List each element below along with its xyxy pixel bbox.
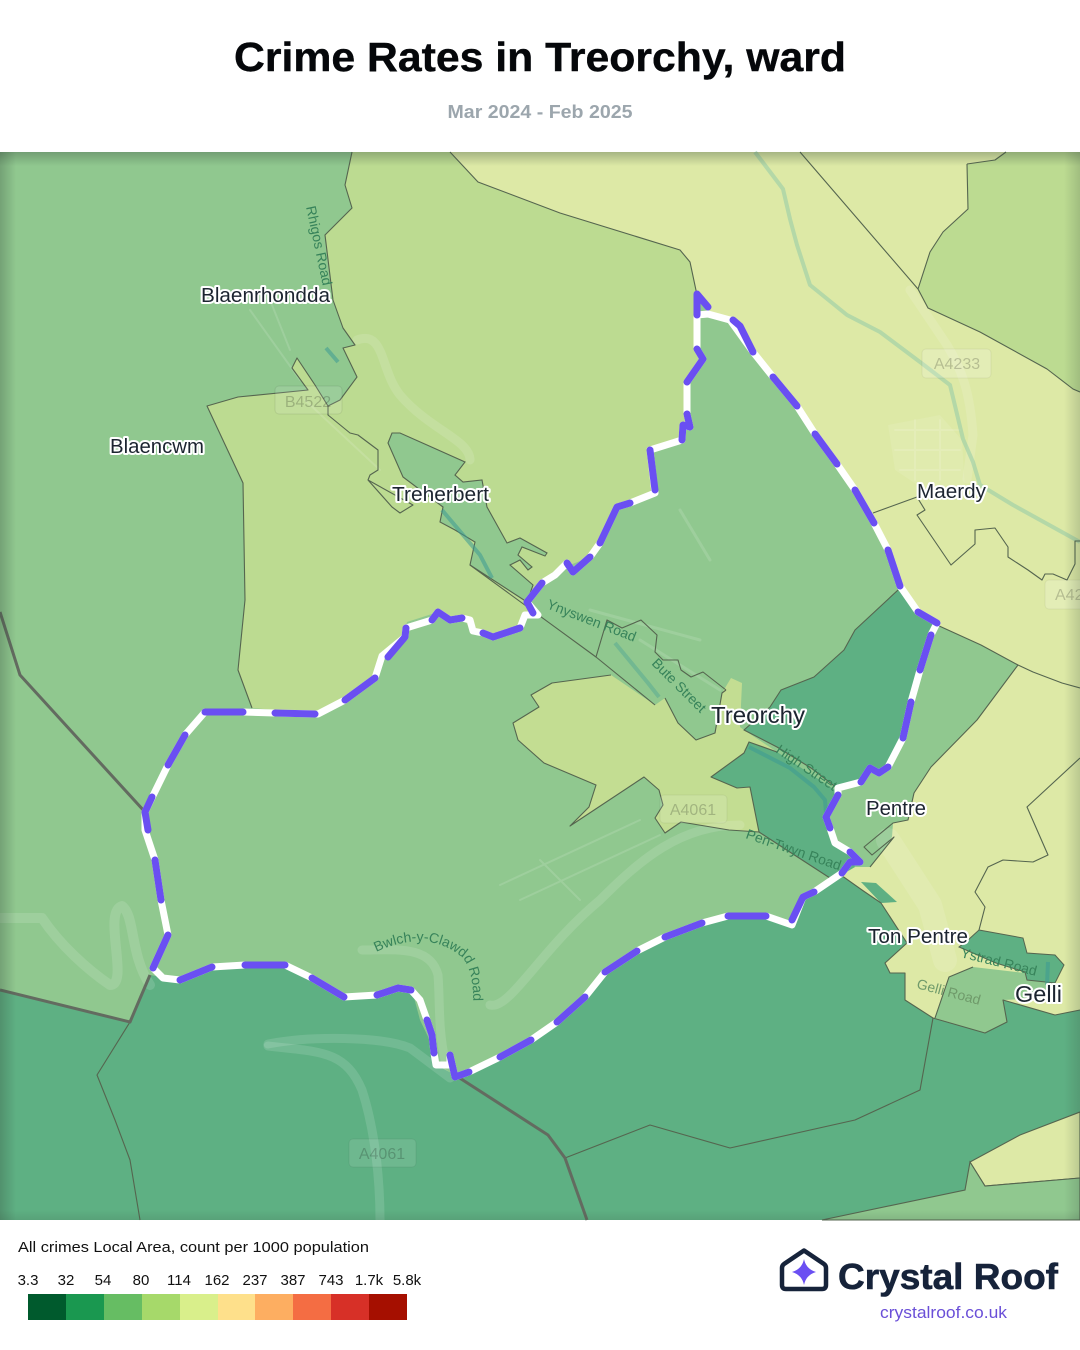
legend scale values: 743 <box>318 1272 344 1289</box>
legend <box>18 1239 422 1320</box>
street names: Bute Street <box>649 655 710 716</box>
place names: Blaenrhondda <box>201 285 331 307</box>
website link: crystalroof.co.uk <box>880 1304 1008 1322</box>
area: yellow southeast <box>970 1112 1080 1186</box>
area: Gelli medium cell <box>935 967 1055 1033</box>
area: pale green central Treorchy <box>513 675 777 833</box>
road number badges: A4061 <box>359 1146 405 1163</box>
area: dark green Ton Pentre patch <box>861 882 897 903</box>
area: Treherbert medium-green cell <box>388 433 547 602</box>
area: dark green south of High Street <box>711 742 855 880</box>
street names: Rhigos Road <box>303 204 336 287</box>
street names: Ystrad Road <box>959 944 1039 979</box>
area: Pentre medium cell <box>827 625 1018 867</box>
place names: Maerdy <box>917 481 986 503</box>
road number badges <box>275 349 1080 1167</box>
legend scale values: 5.8k <box>393 1272 422 1289</box>
map edge shading <box>0 152 1080 1220</box>
street names: Pen-Twyn Road <box>744 826 843 873</box>
place names: Pentre <box>866 798 926 820</box>
area: medium green southeast corner <box>822 1162 1080 1220</box>
place names: Gelli <box>1015 981 1062 1007</box>
area: pale green north-east corner <box>918 152 1080 392</box>
legend scale values: 237 <box>242 1272 268 1289</box>
legend scale values: 3.3 <box>18 1272 38 1289</box>
ward boundary: purple dashes <box>145 294 937 1077</box>
legend scale values: 80 <box>133 1272 149 1289</box>
legend colour ramp <box>28 1294 407 1320</box>
ward boundary: white casing <box>145 295 937 1077</box>
place names: Treorchy <box>711 702 806 728</box>
wordmark: Crystal Roof <box>838 1256 1059 1297</box>
road number badges: B4522 <box>285 394 331 411</box>
street names: Bwlch-y-Clawdd Road <box>374 932 484 1000</box>
place names: Treherbert <box>392 484 489 506</box>
area: yellow north-east <box>450 152 1080 1033</box>
legend scale values: 114 <box>167 1272 191 1289</box>
road number badges: A4233 <box>934 356 980 373</box>
area: dark green southern moorland <box>0 873 1080 1220</box>
place names <box>110 285 1062 1007</box>
legend scale values: 54 <box>95 1272 111 1289</box>
area: pale green Treherbert <box>207 152 703 714</box>
icon: house with star <box>782 1250 826 1289</box>
legend scale values <box>18 1272 422 1289</box>
street names: High Street <box>773 741 840 794</box>
boundary lines <box>0 152 1080 1220</box>
logo: Crystal Roof <box>782 1250 1059 1322</box>
street names: Ynyswen Road <box>545 596 639 645</box>
area: dark green north of High Street <box>744 590 937 788</box>
roads and rivers <box>0 152 1080 1220</box>
street names <box>303 204 1039 1045</box>
area: Gelli dark cell <box>959 930 1064 983</box>
place names: Blaencwm <box>110 436 204 458</box>
legend scale values: 32 <box>58 1272 74 1289</box>
legend scale values: 387 <box>280 1272 306 1289</box>
legend scale values: 162 <box>204 1272 230 1289</box>
subtitle: date range: Mar 2024 - Feb 2025 <box>448 101 632 122</box>
choropleth map <box>0 150 1080 1220</box>
legend title: All crimes Local Area, count per 1000 population <box>18 1239 369 1256</box>
map base: medium green areas <box>0 152 1080 1220</box>
title: Crime Rates in Treorchy, ward <box>234 34 846 80</box>
street names: Gelli Road <box>915 975 983 1008</box>
road number badges: A4061 <box>670 802 716 819</box>
place names: Ton Pentre <box>868 926 968 948</box>
legend scale values: 1.7k <box>355 1272 384 1289</box>
